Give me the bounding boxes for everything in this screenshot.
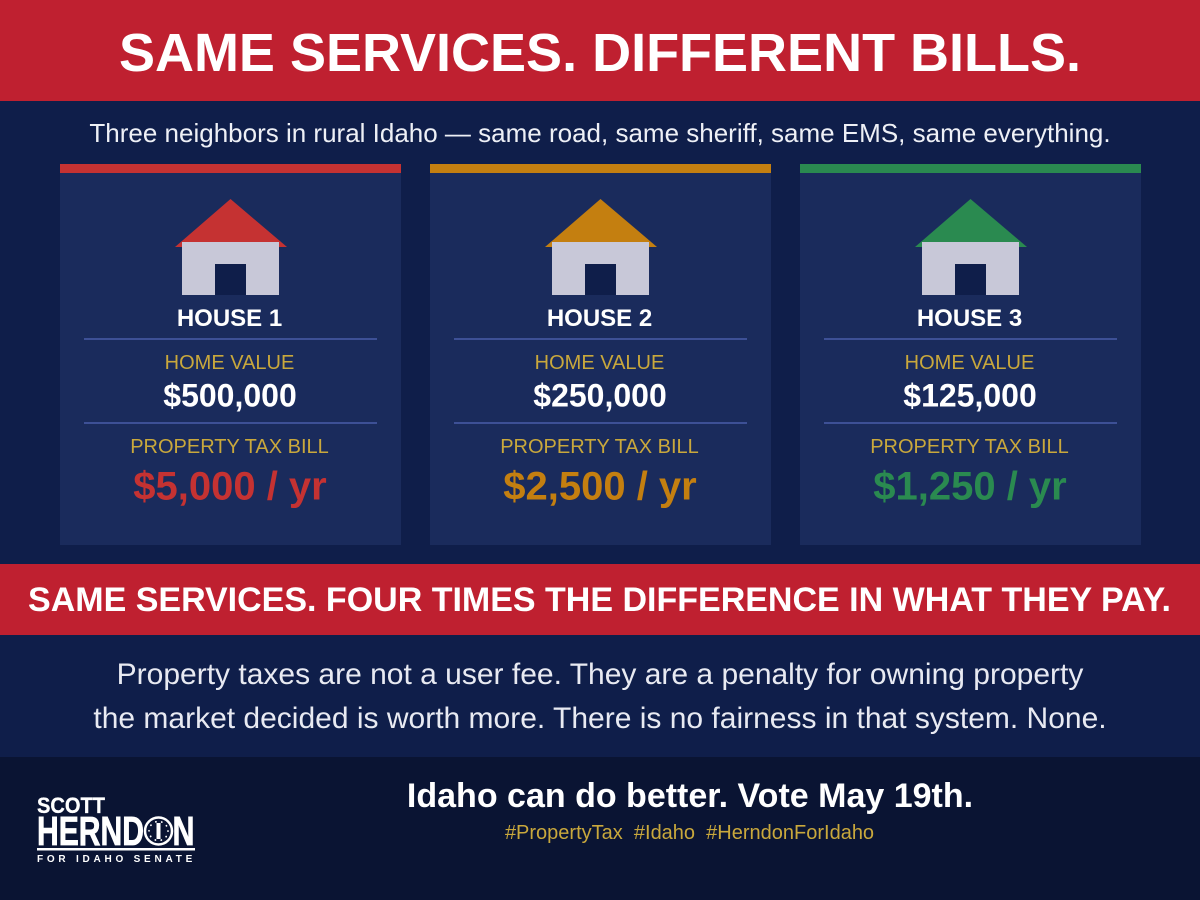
title: SAME SERVICES. DIFFERENT BILLS. (119, 23, 1081, 83)
body statement (93, 658, 1107, 735)
callout banner (0, 564, 1200, 635)
callout banner: SAME SERVICES. FOUR TIMES THE DIFFERENCE IN WHAT THEY PAY. (28, 581, 1171, 619)
house 1 label: HOUSE 1 (177, 305, 282, 332)
home value 3: HOME VALUE (905, 352, 1034, 374)
tax bill 3 (870, 436, 1069, 508)
tax bill 2 (500, 436, 699, 508)
call to action: Idaho can do better. Vote May 19th. (407, 777, 973, 815)
footer (0, 757, 1200, 900)
panel: house 2 (430, 164, 771, 545)
tax bill 2: PROPERTY TAX BILL (500, 436, 699, 458)
logo: Scott Herndon for Idaho Senate: SCOTT (37, 793, 106, 818)
home value 2 (533, 352, 667, 414)
body statement: the market decided is worth more. There is no fairness in that system. None. (93, 702, 1107, 735)
home value 2: $250,000 (533, 378, 667, 414)
logo: Scott Herndon for Idaho Senate: N (172, 808, 194, 854)
tax bill 1: PROPERTY TAX BILL (130, 436, 329, 458)
tax bill 2: $2,500 / yr (503, 464, 697, 508)
house 2 label: HOUSE 2 (547, 305, 652, 332)
home value 2: HOME VALUE (535, 352, 664, 374)
logo: Scott Herndon for Idaho Senate: FOR IDAHO SENATE (37, 854, 196, 865)
home value 1 (163, 352, 297, 414)
house 3 label: HOUSE 3 (917, 305, 1022, 332)
home value 3: $125,000 (903, 378, 1037, 414)
tax bill 3: PROPERTY TAX BILL (870, 436, 1069, 458)
home value 3 (903, 352, 1037, 414)
panel: house 3 (800, 164, 1141, 545)
logo: Scott Herndon for Idaho Senate: HERND (37, 808, 144, 854)
icon: house 2 (545, 199, 657, 295)
icon: house 3 (915, 199, 1027, 295)
body statement: Property taxes are not a user fee. They are a penalty for owning property (117, 658, 1083, 691)
home value 1: HOME VALUE (165, 352, 294, 374)
icon: state seal (145, 818, 172, 844)
home value 1: $500,000 (163, 378, 297, 414)
hashtags: #PropertyTax #Idaho #HerndonForIdaho (505, 822, 874, 844)
tax bill 3: $1,250 / yr (873, 464, 1067, 508)
tax bill 1: $5,000 / yr (133, 464, 327, 508)
panel: house 1 (60, 164, 401, 545)
icon: house 1 (175, 199, 287, 295)
tax bill 1 (130, 436, 329, 508)
logo: Scott Herndon for Idaho Senate (37, 793, 196, 865)
subtitle: Three neighbors in rural Idaho — same road, same sheriff, same EMS, same everything. (89, 118, 1111, 148)
header banner (0, 0, 1200, 101)
